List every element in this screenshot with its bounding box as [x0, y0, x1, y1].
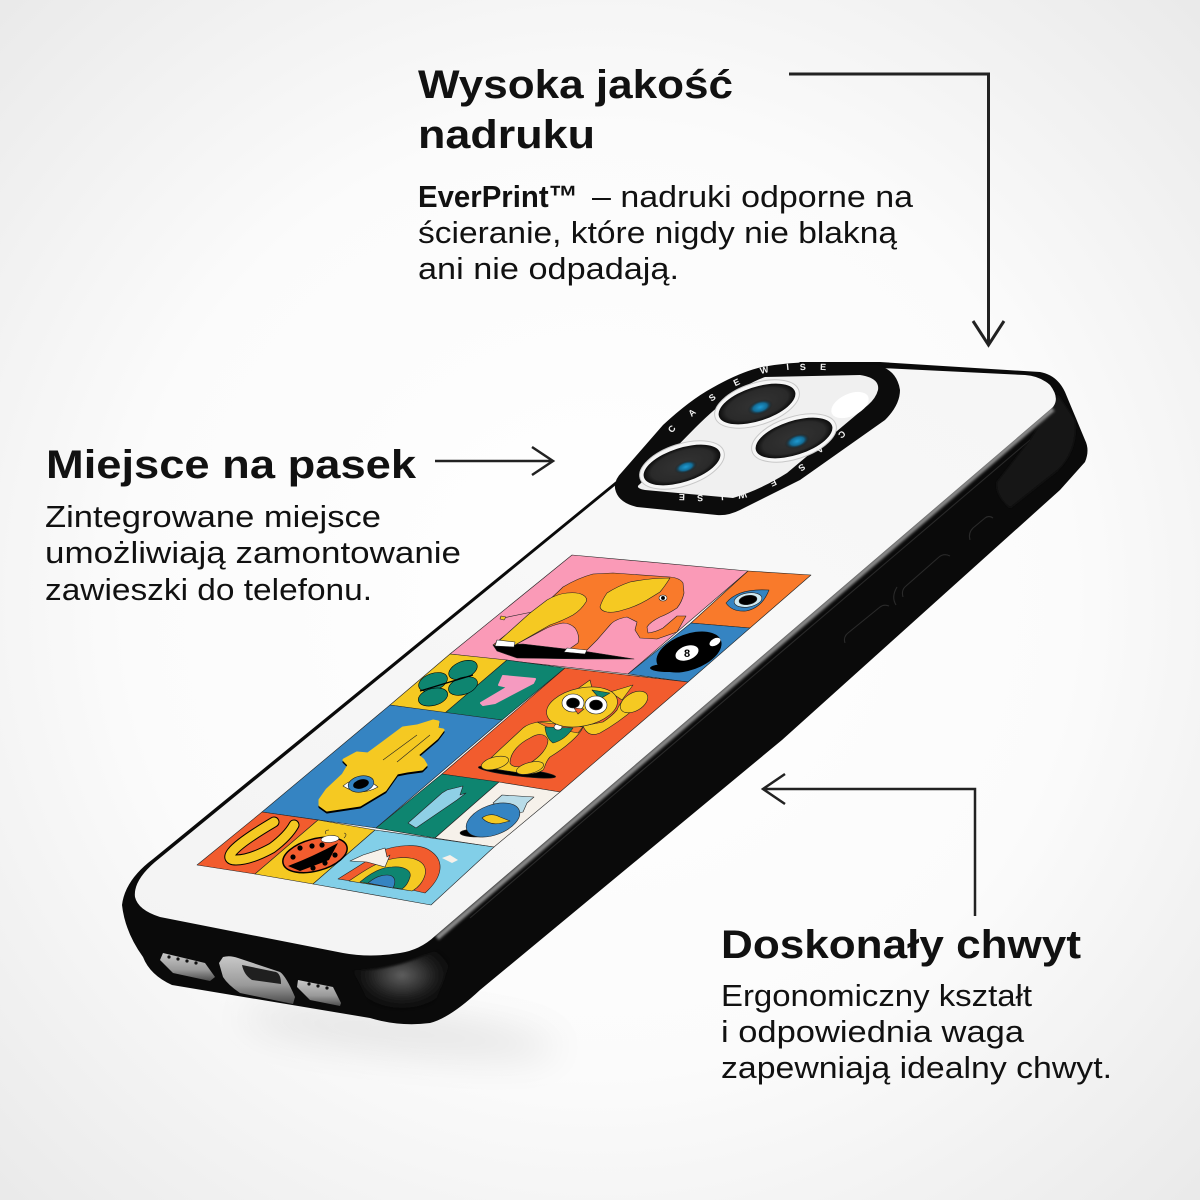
camera module: [615, 362, 900, 515]
icon: crystal: [408, 786, 466, 828]
phone shadow: [239, 997, 561, 1067]
cell: orange cat: [442, 668, 688, 792]
camera glass: [638, 375, 878, 498]
brand text on ring: W: [759, 364, 770, 376]
brand text on ring: C: [836, 428, 847, 441]
icon: hamsa hand: [320, 721, 443, 812]
text: perfect grip description: Ergonomiczny kształt: [721, 978, 1032, 1013]
heading: print quality: nadruku: [418, 113, 595, 157]
text: print quality description: ścieranie, które nigdy nie blakną: [418, 215, 898, 250]
icon: evil eye: [726, 590, 769, 611]
text: strap slot description: umożliwiają zamontowanie: [45, 535, 461, 570]
icon: fish bowl: [460, 795, 534, 844]
cell: yellow ladybug: [255, 820, 375, 884]
cell: orange horseshoe: [197, 812, 318, 874]
block: print quality: [418, 63, 914, 286]
cell: cream fish bowl: [435, 782, 560, 847]
phone case body: [122, 362, 1088, 1024]
printed artwork: [197, 555, 811, 905]
text: print quality description: ani nie odpadają.: [418, 251, 679, 286]
brand text on ring: E: [820, 362, 826, 372]
heading: print quality: Wysoka jakość: [418, 63, 733, 107]
text: perfect grip description: [721, 978, 1112, 1085]
cell: pink elephant: [450, 555, 748, 674]
icon: four-leaf clover: [416, 656, 480, 709]
brand text on ring: A: [814, 443, 825, 456]
icon: rainbow: [338, 846, 458, 893]
icon: horseshoe: [230, 822, 294, 860]
icon: lucky seven: [481, 676, 535, 705]
camera ring: [615, 362, 900, 515]
cell: blue eight ball: [628, 623, 750, 682]
cell: green crystal: [376, 774, 499, 838]
text: print quality description: – nadruki odporne na: [592, 179, 914, 214]
lens left: [634, 431, 730, 499]
brand text on ring: [666, 362, 847, 503]
bottom corner gloss: [352, 948, 452, 1016]
grey bevel along face edge: [437, 409, 1053, 938]
arrow: strap slot to phone: [435, 447, 553, 475]
charging port: [219, 956, 295, 1004]
arrow: perfect grip to phone side: [763, 774, 975, 916]
side seam and buttons: [470, 440, 1030, 918]
icon: elephant: [493, 573, 686, 659]
heading: strap slot: Miejsce na pasek: [46, 443, 417, 487]
right speaker: [297, 980, 341, 1006]
cell: green seven: [445, 660, 565, 720]
back face: [135, 368, 1056, 956]
lens top: [709, 370, 805, 438]
brand text on ring: S: [697, 493, 703, 503]
text: strap slot description: zawieszki do telefonu.: [45, 572, 372, 607]
side grip patch: [997, 395, 1075, 508]
brand text on ring: I: [786, 362, 789, 372]
brand text on ring: A: [686, 407, 698, 419]
lens right: [746, 404, 842, 472]
text: strap slot description: [45, 499, 461, 607]
text: perfect grip description: i odpowiednia waga: [721, 1014, 1025, 1049]
icon: ladybug: [279, 830, 351, 879]
brand text on ring: E: [768, 477, 778, 489]
brand text on ring: I: [721, 492, 724, 502]
cell: blue rainbow: [313, 830, 494, 905]
brand text on ring: S: [707, 392, 718, 403]
icon: lucky cat: [478, 680, 651, 781]
icon: eight ball: 8: [684, 648, 690, 660]
cell: blue hand: [262, 705, 502, 828]
text: print quality description: EverPrint™: [418, 179, 578, 214]
text: print quality description: [418, 179, 914, 286]
heading: print quality: [418, 63, 733, 157]
cell: orange eye: [691, 571, 811, 628]
block: perfect grip: [721, 923, 1112, 1085]
flash: [827, 387, 873, 423]
brand text on ring: S: [796, 462, 807, 473]
text: strap slot description: Zintegrowane miejsce: [45, 499, 381, 534]
left speaker: [160, 953, 215, 981]
phone: [122, 362, 1088, 1024]
icon: eight ball: [650, 623, 727, 681]
brand text on ring: W: [737, 489, 748, 501]
brand text on ring: S: [799, 362, 806, 372]
heading: perfect grip: Doskonały chwyt: [721, 923, 1081, 967]
brand text on ring: C: [666, 423, 678, 435]
brand text on ring: E: [679, 492, 685, 502]
arrow: print quality to phone back: [789, 74, 1004, 345]
text: perfect grip description: zapewniają idealny chwyt.: [721, 1050, 1112, 1085]
brand text on ring: E: [732, 376, 742, 388]
block: strap slot: [45, 443, 461, 607]
cell: yellow clover: [390, 654, 507, 713]
